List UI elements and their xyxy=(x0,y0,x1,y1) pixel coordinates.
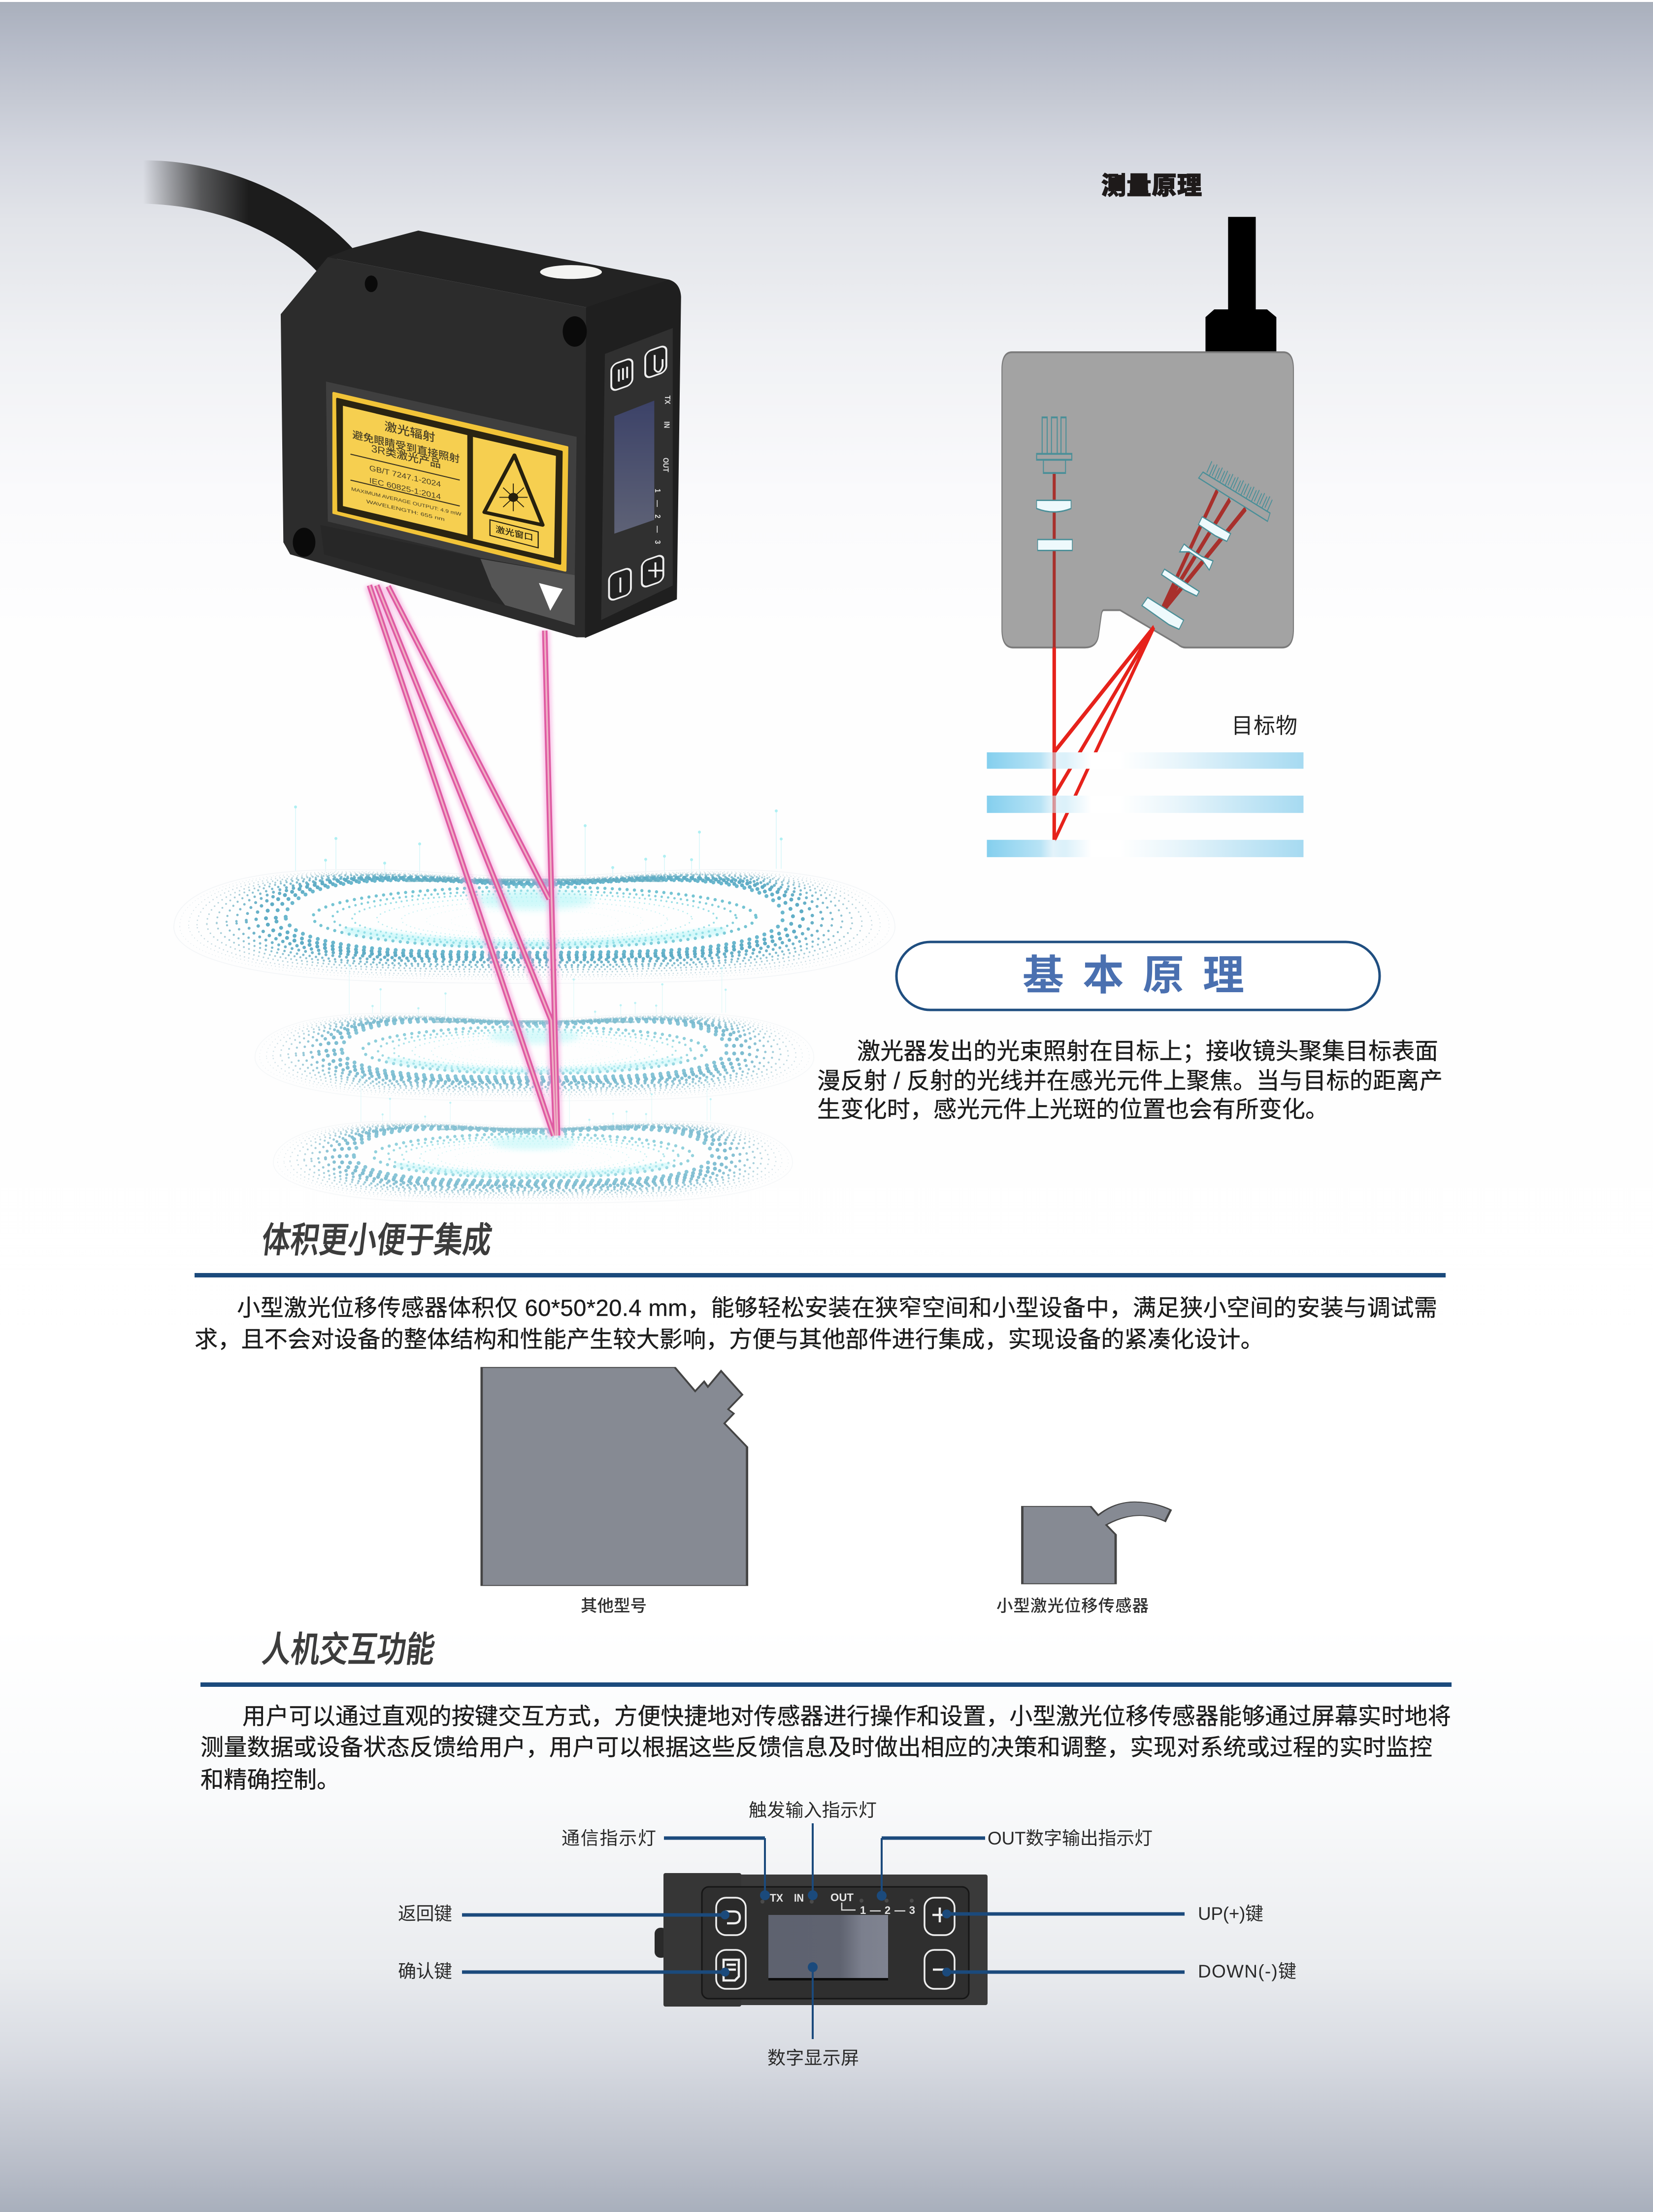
panel body xyxy=(663,1875,988,2005)
indicator labels xyxy=(770,1891,915,1916)
side indicator text: 1—2—3 xyxy=(653,489,661,544)
compact size paragraph xyxy=(195,1295,1437,1353)
indicator labels: TX xyxy=(770,1892,783,1904)
caption: other models: 其他型号 xyxy=(581,1597,647,1615)
red beams outside housing xyxy=(1054,627,1154,840)
label warning text: IEC 60825-1:2014 xyxy=(369,476,441,502)
indicator lamps xyxy=(760,1899,914,1904)
side indicator text: TX xyxy=(663,396,671,404)
compact size paragraph: 求，且不会对设备的整体结构和性能产生较大影响，方便与其他部件进行集成，实现设备的紧凑化设计。 xyxy=(195,1327,1264,1353)
sensor cable xyxy=(135,160,354,271)
label warning text: MAXIMUM AVERAGE OUTPUT: 4.9 mW xyxy=(351,487,462,517)
heading: compact size: 体积更小便于集成 xyxy=(260,1220,494,1260)
sensor product illustration xyxy=(135,160,681,638)
label warning text: 3R类激光产品 xyxy=(371,442,441,470)
icon: laser hazard triangle xyxy=(484,455,543,525)
red beams inside housing xyxy=(1054,472,1246,647)
target surfaces xyxy=(987,752,1303,857)
display screen xyxy=(768,1915,888,1980)
indicator labels: 1—2—3 xyxy=(860,1904,915,1916)
panel inset xyxy=(702,1887,969,1999)
interaction paragraph: 测量数据或设备状态反馈给用户，用户可以根据这些反馈信息及时做出相应的决策和调整，实现对系统或过程的实时监控 xyxy=(200,1735,1432,1761)
rings: middle surface xyxy=(255,965,814,1101)
size comparison silhouettes xyxy=(482,1368,1171,1585)
side control panel xyxy=(601,328,673,620)
receiver lenses xyxy=(1142,517,1230,629)
rings: lower surface xyxy=(273,1076,793,1203)
button icons xyxy=(724,1908,947,1980)
top window xyxy=(540,265,602,279)
callout labels: UP(+)键 xyxy=(1198,1904,1263,1924)
side indicator text: IN xyxy=(662,421,670,428)
measuring principle diagram xyxy=(987,217,1303,857)
compact size paragraph: 小型激光位移传感器体积仅 60*50*20.4 mm，能够轻松安装在狭窄空间和小型设备中，满足狭小空间的安装与调试需 xyxy=(237,1295,1437,1321)
yellow laser warning label xyxy=(333,393,567,570)
callout labels: 确认键 xyxy=(398,1961,452,1981)
laser window tag xyxy=(490,520,538,548)
callout labels: 通信指示灯 xyxy=(562,1828,656,1848)
basic principle heading pill: 基本原理 xyxy=(1023,952,1263,999)
dotted target surface rings xyxy=(174,807,895,1203)
silhouette: other models xyxy=(482,1368,747,1585)
callout labels: DOWN(-)键 xyxy=(1198,1961,1296,1981)
sensor housing cross-section xyxy=(1002,352,1293,647)
side buttons xyxy=(609,345,666,602)
callout labels: 返回键 xyxy=(398,1904,452,1924)
basic principle paragraph: 激光器发出的光束照射在目标上；接收镜头聚集目标表面 xyxy=(857,1039,1438,1065)
heading rule: compact size xyxy=(195,1273,1446,1277)
label warning text: WAVELENGTH: 655 nm xyxy=(366,499,445,523)
icon: white arrow xyxy=(539,583,562,611)
basic principle paragraph: 漫反射 / 反射的光线并在感光元件上聚焦。当与目标的距离产 xyxy=(817,1068,1443,1094)
side indicator text xyxy=(653,396,671,544)
label warning text xyxy=(351,420,462,523)
callout leader lines xyxy=(462,1823,1185,2039)
side indicator text: OUT xyxy=(661,458,669,472)
lens window plate with arrow xyxy=(481,559,575,625)
sensor front face xyxy=(281,257,595,637)
control panel front view xyxy=(655,1873,988,2007)
measuring principle title: 测量原理 xyxy=(1101,172,1202,200)
indicator labels: IN xyxy=(794,1892,804,1904)
heading: human-machine interaction: 人机交互功能 xyxy=(260,1629,437,1669)
laser window tag: 激光窗口 xyxy=(496,525,533,542)
target object label: 目标物 xyxy=(1231,714,1297,738)
side display screen xyxy=(614,401,654,534)
sensor top face xyxy=(328,231,680,307)
pink laser beams xyxy=(369,585,558,1136)
cable stub xyxy=(655,1928,667,1958)
interaction paragraph: 用户可以通过直观的按键交互方式，方便快捷地对传感器进行操作和设置，小型激光位移传感器能够通过屏幕实时地将 xyxy=(242,1704,1451,1730)
label backing plate xyxy=(326,382,577,575)
callout labels: 数字显示屏 xyxy=(767,2048,859,2068)
screw holes xyxy=(293,275,587,557)
laser emitter module xyxy=(1037,417,1072,473)
label warning text: 激光辐射 xyxy=(384,420,435,444)
heading rule: human-machine interaction xyxy=(200,1682,1452,1687)
sensor side face xyxy=(585,280,681,638)
interaction paragraph xyxy=(200,1704,1451,1793)
callout labels xyxy=(398,1800,1296,2068)
indicator labels: OUT xyxy=(830,1891,854,1904)
basic principle paragraph: 生变化时，感光元件上光斑的位置也会有所变化。 xyxy=(817,1097,1328,1123)
receiver photo sensor array xyxy=(1199,463,1271,521)
interaction paragraph: 和精确控制。 xyxy=(200,1767,340,1793)
connector plug xyxy=(1205,217,1276,356)
basic principle paragraph xyxy=(817,1039,1443,1123)
emitter lenses xyxy=(1037,501,1072,550)
basic principle heading pill xyxy=(896,942,1380,1010)
silhouette: compact sensor xyxy=(1023,1502,1171,1584)
label warning text: GB/T 7247.1-2024 xyxy=(369,464,441,489)
lower front plate xyxy=(320,525,575,625)
label warning text: 避免眼睛受到直接照射 xyxy=(352,429,460,465)
rings: upper surface xyxy=(174,807,895,983)
callout labels: OUT数字输出指示灯 xyxy=(988,1828,1153,1848)
panel buttons xyxy=(716,1898,955,1989)
caption: compact sensor: 小型激光位移传感器 xyxy=(996,1597,1149,1615)
callout labels: 触发输入指示灯 xyxy=(749,1800,877,1820)
